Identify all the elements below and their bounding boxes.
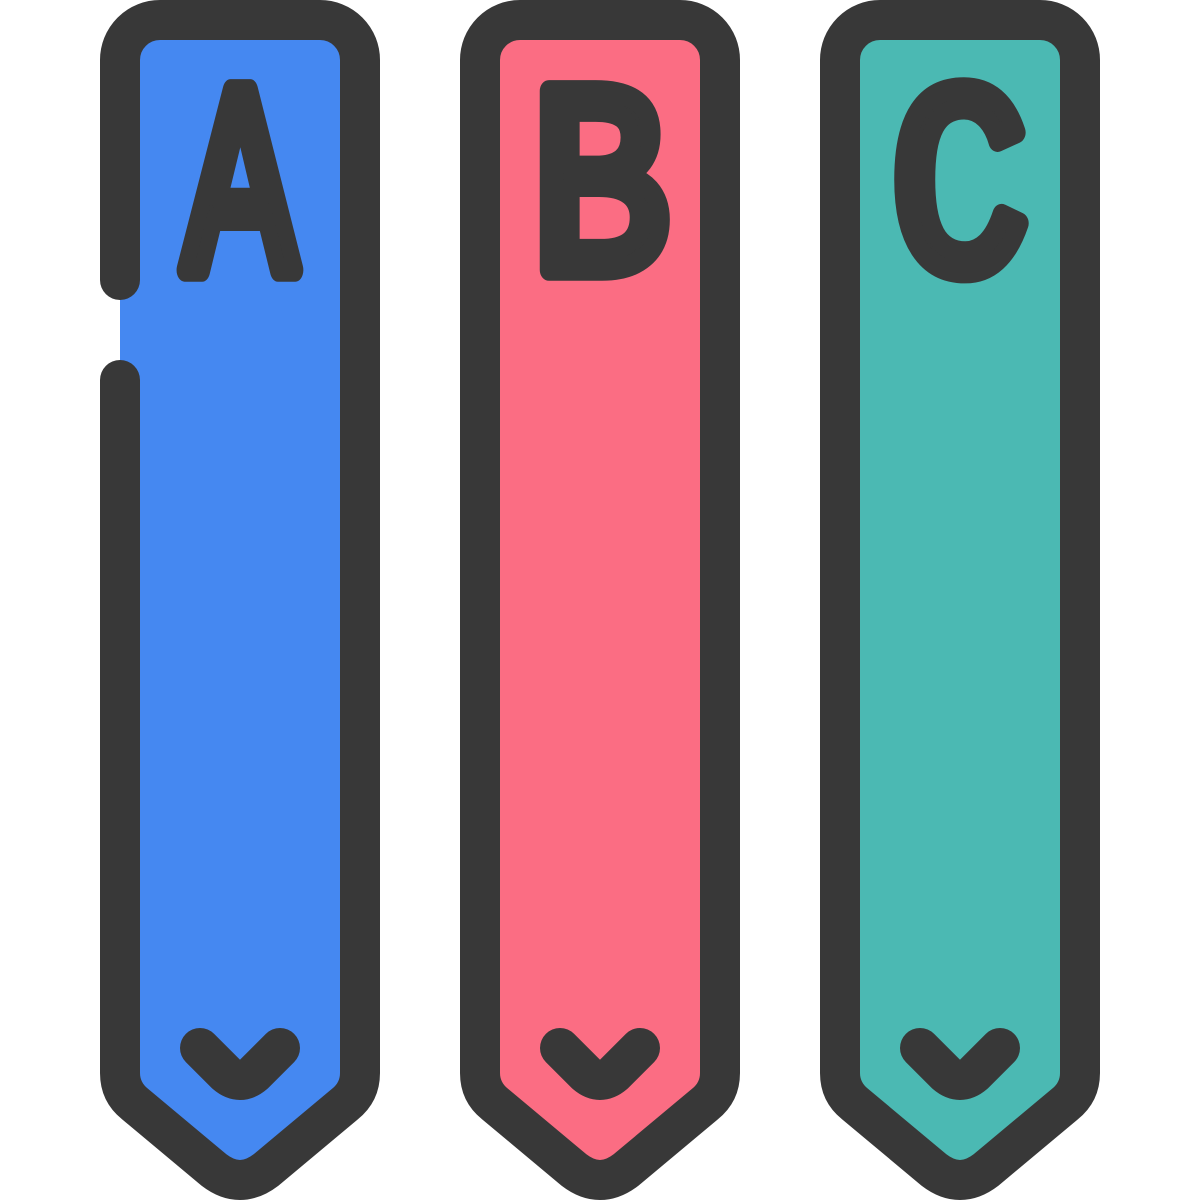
pink tag outline [480, 20, 720, 1180]
letter B: B [531, 44, 669, 352]
chevron down icon [200, 1048, 280, 1080]
teal tag outline [840, 20, 1080, 1180]
blue tag outline with gap [120, 20, 360, 1180]
pink tag fill [480, 20, 720, 1180]
panel: blue tag A [120, 20, 360, 1180]
panel: pink tag B [480, 20, 720, 1180]
panel: teal tag C [840, 20, 1080, 1180]
letter C: C [891, 44, 1029, 352]
chevron down icon [560, 1048, 640, 1080]
chevron down icon [920, 1048, 1000, 1080]
letter A: A [185, 43, 296, 352]
blue tag fill [120, 20, 360, 1180]
teal tag fill [840, 20, 1080, 1180]
